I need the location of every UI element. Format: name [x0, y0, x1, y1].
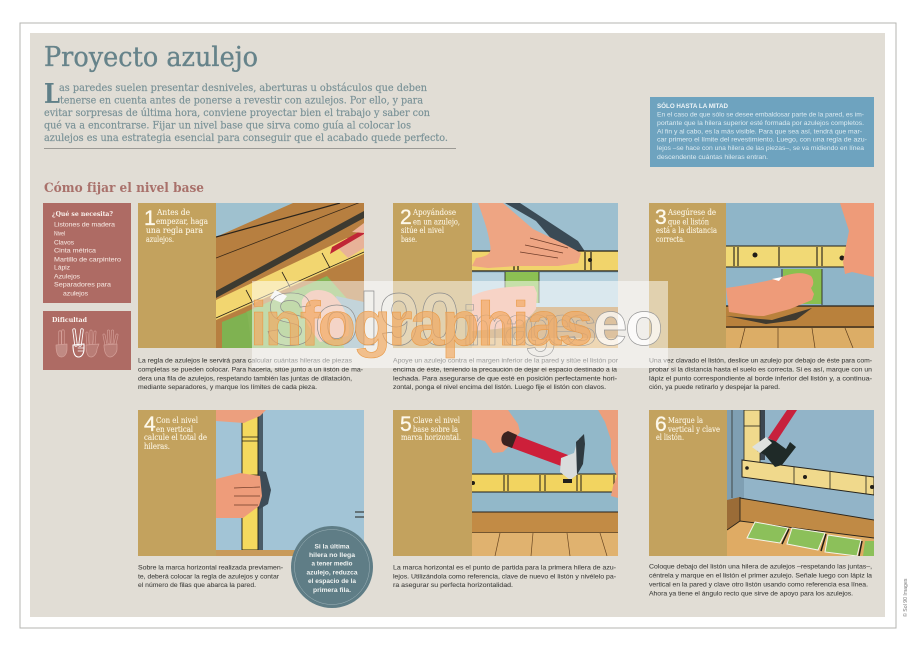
- step 4 text: te, deberá colocar la regla de azulejos y contar: [138, 574, 280, 580]
- step 3 text: [649, 358, 872, 391]
- step 2 caption panel: en un azulejo,: [413, 216, 460, 226]
- step 5 caption panel: Clave el nivel: [413, 415, 460, 425]
- watermark: [250, 278, 668, 368]
- panel: sólo hasta la mitad: SÓLO HASTA LA MITAD: [657, 101, 728, 110]
- step 3 caption panel: está a la distancia: [656, 225, 717, 235]
- step 5 text: [393, 564, 616, 589]
- step 3 caption panel: que el listón: [668, 216, 710, 226]
- panel: sólo hasta la mitad: [650, 97, 874, 167]
- step 5 text: ra asegurar su perfecta horizontalidad.: [393, 582, 513, 589]
- step 5 caption panel: 5: [400, 413, 412, 436]
- step 2 caption panel: [393, 203, 472, 348]
- step 4 caption panel: [138, 410, 216, 556]
- step 4 text: Sobre la marca horizontal realizada previamen-: [138, 564, 283, 572]
- step 6 caption panel: vertical y clave: [667, 424, 720, 434]
- callout circle: azulejo, reduzca: [306, 570, 358, 576]
- step 2 caption panel: 2: [400, 206, 412, 229]
- step 2 caption panel: base.: [401, 234, 417, 244]
- watermark: Sol90: [266, 278, 460, 361]
- step 1 caption panel: 1: [144, 207, 156, 230]
- step 1 text: mediante separadores, y marque los límites de cada pieza.: [138, 384, 317, 391]
- panel: sólo hasta la mitad: lejos –se hace con una hilera de las piezas–, se va midiendo en línea: [657, 145, 865, 152]
- step 3 text: ción, ya puede retirarlo y despejar la pared.: [649, 384, 780, 391]
- step 4 caption panel: calcule el total de: [144, 432, 207, 442]
- step 6 text: [649, 564, 872, 598]
- step 3 caption panel: 3: [655, 206, 667, 229]
- intro text block: azulejos es una estrategia esencial para conseguir que el acabado quede perfecto.: [44, 132, 448, 144]
- step 3 caption panel: correcta.: [656, 234, 685, 244]
- step 6: [649, 410, 874, 598]
- step 1 text: dera una fila de azulejos, respetando también las juntas de dilatación,: [138, 376, 352, 382]
- panel: qué se necesita: Nivel: [54, 230, 65, 238]
- step 5 illustration: [471, 410, 618, 556]
- step 3: [649, 203, 874, 391]
- panel: dificultad: [43, 311, 131, 370]
- step 1 caption panel: azulejos.: [146, 234, 174, 244]
- panel: qué se necesita: Listones de madera: [54, 222, 115, 228]
- step 1 caption panel: empezar, haga: [156, 216, 208, 226]
- step 4 text: el número de filas que abarca la pared.: [138, 582, 256, 589]
- step 6 text: vertical en la pared y clave otro listón usando como referencia esa línea.: [649, 582, 868, 588]
- step 3 illustration: [726, 203, 874, 348]
- panel: qué se necesita: ¿Qué se necesita?: [52, 210, 113, 218]
- panel: qué se necesita: Separadores para: [54, 282, 111, 288]
- title: Proyecto azulejo: [44, 42, 258, 73]
- step 1 caption panel: [138, 203, 216, 348]
- panel: qué se necesita: Martillo de carpintero: [54, 256, 121, 264]
- panel: dificultad: Dificultad: [52, 316, 87, 324]
- step 1 text: completas se pueden colocar. Para hacerla, sitúe junto a un listón de ma-: [138, 366, 363, 374]
- panel: qué se necesita: Cinta métrica: [54, 248, 96, 254]
- icon: hands difficulty scale: [56, 330, 117, 357]
- intro text block: L: [44, 79, 60, 110]
- step 4 illustration: [216, 410, 364, 556]
- panel: qué se necesita: azulejos: [63, 290, 89, 298]
- watermark: infographias: [250, 290, 593, 359]
- step 3 text: probar si la distancia hasta el suelo es correcta. Si es así, marque con un: [649, 366, 872, 374]
- step 2 text: Apoye un azulejo contra el margen inferior de la pared y sitúe el listón por: [393, 358, 619, 364]
- step 2 text: encima de éste, teniendo la precaución de dejar el espacio destinado a la: [393, 366, 617, 374]
- step 2 illustration: [472, 200, 618, 348]
- step 5 text: La marca horizontal es el punto de partida para la primera hilera de azu-: [393, 564, 616, 572]
- step 4 caption panel: Con el nivel: [156, 415, 198, 425]
- step 5 text: lejos. Utilizándola como referencia, clave de nuevo el listón y nivélelo pa-: [393, 574, 616, 580]
- panel: sólo hasta la mitad: car primero el límite del revestimiento. Luego, con una regla de azu-: [657, 136, 867, 144]
- step 6 text: Ahora ya tiene el ángulo recto que sirve de apoyo para los azulejos.: [649, 590, 853, 598]
- photo credit: © Sol 90 Images: [902, 578, 909, 617]
- step 3 text: lápiz el punto correspondiente al borde inferior del listón y, a continua-: [649, 376, 872, 382]
- step 4 caption panel: en vertical: [156, 424, 193, 434]
- step 4 caption panel: 4: [144, 413, 156, 436]
- callout circle: Si la última: [314, 544, 350, 550]
- step 4 caption panel: hileras.: [144, 441, 170, 451]
- step 2 text: [393, 358, 619, 391]
- step 2 caption panel: Apoyándose: [412, 207, 456, 217]
- step 1 caption panel: una regla para: [146, 225, 203, 235]
- step 6 caption panel: Marque la: [668, 415, 703, 425]
- step 6 caption panel: el listón.: [656, 432, 684, 442]
- step 6 caption panel: [649, 410, 727, 556]
- panel: sólo hasta la mitad: Al fin y al cabo, es la más visible. Para que sea así, tendrá que mar-: [657, 128, 862, 136]
- step 6 illustration: [727, 410, 874, 556]
- step 4 text: [138, 564, 283, 589]
- callout circle: el espacio de la: [308, 578, 357, 585]
- step 2 caption panel: sitúe el nivel: [401, 225, 444, 235]
- step 5: [393, 410, 618, 589]
- intro text block: qué va a encontrarse. Fijar un nivel base que sirva como guía al colocar los: [44, 120, 411, 132]
- panel: sólo hasta la mitad: descendente cuántas hileras entran.: [657, 154, 768, 161]
- intro text block: tenerse en cuenta antes de ponerse a revestir con azulejos. Por ello, y para: [60, 94, 423, 106]
- intro text block: as paredes suelen presentar desniveles, aberturas u obstáculos que deben: [59, 82, 427, 94]
- callout circle: [291, 526, 373, 608]
- panel: qué se necesita: [43, 203, 131, 303]
- callout circle: primera fila.: [313, 587, 351, 594]
- watermark: images: [462, 294, 597, 357]
- step 1 text: [138, 358, 363, 391]
- step 5 caption panel: marca horizontal.: [401, 432, 461, 442]
- step 5 caption panel: [393, 410, 472, 556]
- step 1 caption panel: Antes de: [156, 207, 190, 217]
- step 2 text: lechada. Para asegurarse de que esté en posición perfectamente hori-: [393, 376, 617, 382]
- watermark: eo: [593, 290, 663, 359]
- step 3 caption panel: [649, 203, 726, 348]
- step 6 caption panel: 6: [655, 413, 667, 436]
- step 1 text: La regla de azulejos le servirá para calcular cuántas hileras de piezas: [138, 358, 352, 364]
- step 6 text: céntrela y marque en el listón el primer azulejo. Señale luego con lápiz la: [649, 572, 872, 580]
- step 3 caption panel: Asegúrese de: [667, 207, 716, 217]
- step 2 text: zontal, ponga el nivel encima del listón. Luego fije el listón con clavos.: [393, 384, 606, 391]
- panel: qué se necesita: Azulejos: [54, 274, 81, 280]
- intro text block: evitar sorpresas de última hora, conviene proyectar bien el trabajo y saber con: [44, 107, 430, 119]
- step 1: [138, 200, 366, 391]
- step 3 text: Una vez clavado el listón, deslice un azulejo por debajo de éste para com-: [649, 358, 872, 364]
- panel: qué se necesita: Clavos: [54, 240, 75, 246]
- panel: sólo hasta la mitad: En el caso de que sólo se desee embaldosar parte de la pared, es im-: [657, 112, 864, 118]
- step 1 illustration: [216, 200, 366, 348]
- panel: qué se necesita: Lápiz: [54, 264, 70, 272]
- section heading: Cómo fijar el nivel base: [44, 181, 204, 196]
- step 5 caption panel: base sobre la: [413, 424, 458, 434]
- step 6 text: Coloque debajo del listón una hilera de azulejos –respetando las juntas–,: [649, 564, 872, 570]
- callout circle: a tener medio: [312, 560, 353, 568]
- step 2: [393, 200, 619, 391]
- intro text block: [44, 79, 448, 144]
- step 4: [138, 410, 364, 589]
- callout circle: hilera no llega: [309, 552, 356, 559]
- panel: sólo hasta la mitad: portante que la hilera superior esté formada por azulejos completos.: [657, 120, 864, 127]
